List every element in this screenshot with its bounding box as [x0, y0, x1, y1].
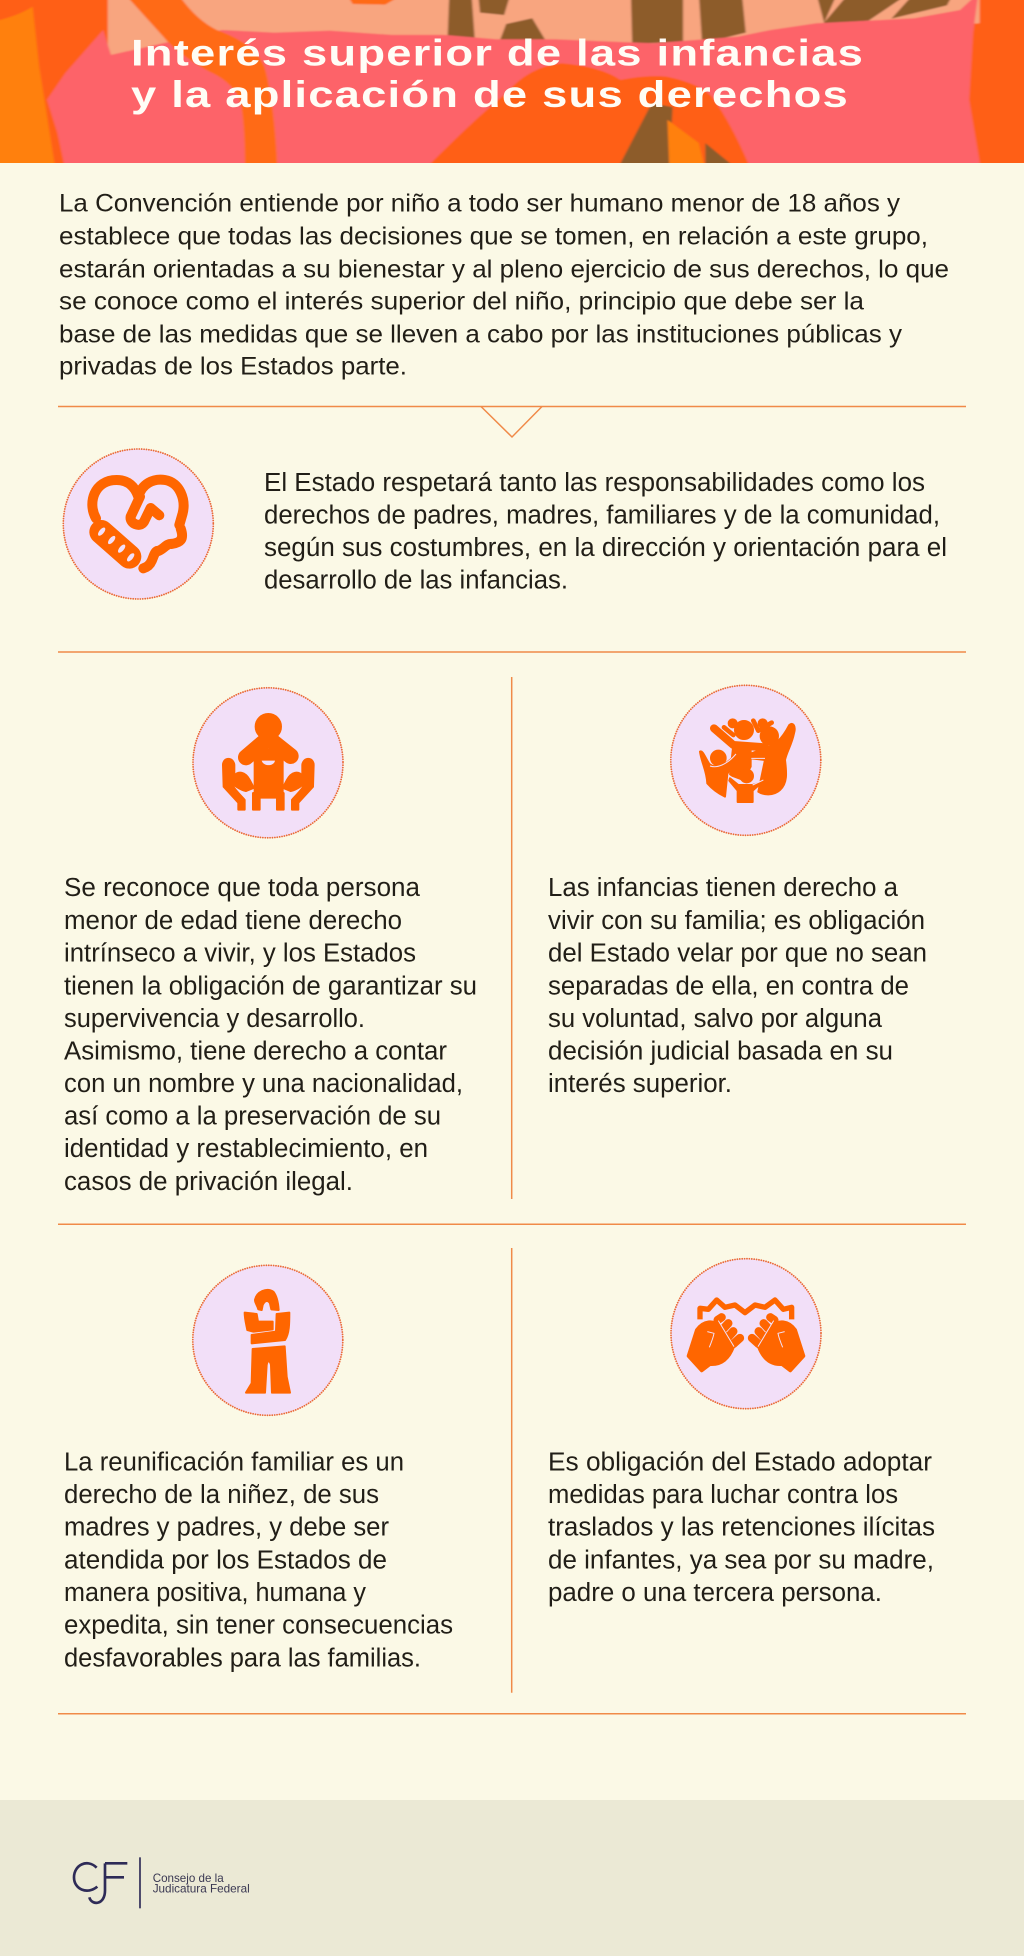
divider with arrow: [58, 406, 966, 437]
footer band: [0, 1800, 1024, 1956]
text: las infancias: [548, 874, 927, 1098]
text: es obligación: traslados y las retenciones ilícitas: [548, 1514, 935, 1542]
text: las infancias: separadas de ella, en contra de: [548, 972, 909, 1000]
icon: child held by hands: [193, 688, 343, 838]
title: [131, 32, 864, 115]
text: la reunificación: La reunificación familiar es un: [64, 1448, 404, 1476]
text: es obligación: [548, 1448, 935, 1607]
text: la reunificación: madres y padres, y debe ser: [64, 1514, 389, 1542]
intro text block: privadas de los Estados parte.: [59, 352, 407, 380]
text: el Estado respetará: según sus costumbres, en la dirección y orientación para el: [264, 534, 947, 562]
intro text block: La Convención entiende por niño a todo ser humano menor de 18 años y: [59, 190, 901, 218]
icon: fists with barrier: [671, 1259, 821, 1409]
text: se reconoce: supervivencia y desarrollo.: [64, 1005, 365, 1033]
icon: family: [671, 685, 821, 835]
title: y la aplicación de sus derechos: [131, 73, 849, 115]
grid rules and column dividers: [58, 652, 966, 1714]
text: las infancias: interés superior.: [548, 1070, 732, 1098]
icon: handshake heart: [63, 449, 213, 599]
icon: standing person: [193, 1265, 343, 1415]
text: se reconoce: intrínseco a vivir, y los Estados: [64, 940, 416, 968]
text: las infancias: vivir con su familia; es obligación: [548, 907, 925, 935]
text: la reunificación: atendida por los Estados de: [64, 1546, 387, 1574]
text: se reconoce: con un nombre y una nacionalidad,: [64, 1070, 463, 1098]
text: se reconoce: [64, 874, 477, 1196]
text: es obligación: medidas para luchar contra los: [548, 1481, 898, 1509]
text: se reconoce: identidad y restablecimiento, en: [64, 1135, 428, 1163]
text: se reconoce: menor de edad tiene derecho: [64, 907, 402, 935]
text: se reconoce: tienen la obligación de garantizar su: [64, 972, 477, 1000]
text: se reconoce: Se reconoce que toda persona: [64, 874, 421, 902]
panel: vivir con su familia: [548, 685, 927, 1098]
text: se reconoce: Asimismo, tiene derecho a contar: [64, 1037, 448, 1065]
text: la reunificación: expedita, sin tener consecuencias: [64, 1612, 453, 1640]
header banner: [0, 0, 1024, 170]
text: el Estado respetará: [264, 469, 947, 594]
logo text: Consejo de la: [153, 1871, 224, 1885]
panel: traslados ilícitos: [548, 1259, 935, 1607]
text: es obligación: de infantes, ya sea por su madre,: [548, 1546, 934, 1574]
logo: CJF: [74, 1857, 140, 1908]
text: el Estado respetará: derechos de padres, madres, familiares y de la comunidad,: [264, 502, 940, 530]
text: se reconoce: así como a la preservación de su: [64, 1102, 441, 1130]
panel: reunificación familiar: [64, 1265, 453, 1672]
logo text: Judicatura Federal: [153, 1882, 250, 1896]
text: se reconoce: casos de privación ilegal.: [64, 1168, 353, 1196]
text: las infancias: decisión judicial basada en su: [548, 1037, 893, 1065]
text: es obligación: padre o una tercera persona.: [548, 1579, 882, 1607]
text: es obligación: Es obligación del Estado adoptar: [548, 1448, 933, 1476]
intro text block: se conoce como el interés superior del niño, principio que debe ser la: [59, 288, 864, 316]
text: las infancias: su voluntad, salvo por alguna: [548, 1005, 883, 1033]
text: la reunificación: [64, 1448, 453, 1672]
text: la reunificación: desfavorables para las familias.: [64, 1644, 421, 1672]
text: la reunificación: derecho de la niñez, de sus: [64, 1481, 379, 1509]
text: la reunificación: manera positiva, humana y: [64, 1579, 366, 1607]
intro text block: [59, 190, 949, 380]
panel: responsabilidades: [63, 449, 947, 599]
intro text block: establece que todas las decisiones que se tomen, en relación a este grupo,: [59, 222, 928, 250]
logo text: [153, 1871, 250, 1896]
text: las infancias: del Estado velar por que no sean: [548, 940, 927, 968]
title: Interés superior de las infancias: [131, 32, 864, 74]
text: las infancias: Las infancias tienen derecho a: [548, 874, 899, 902]
panel: derecho a vivir: [64, 688, 477, 1196]
intro text block: base de las medidas que se lleven a cabo por las instituciones públicas y: [59, 320, 903, 348]
text: el Estado respetará: El Estado respetará tanto las responsabilidades como los: [264, 469, 925, 497]
intro text block: estarán orientadas a su bienestar y al pleno ejercicio de sus derechos, lo que: [59, 256, 949, 284]
text: el Estado respetará: desarrollo de las infancias.: [264, 566, 568, 594]
